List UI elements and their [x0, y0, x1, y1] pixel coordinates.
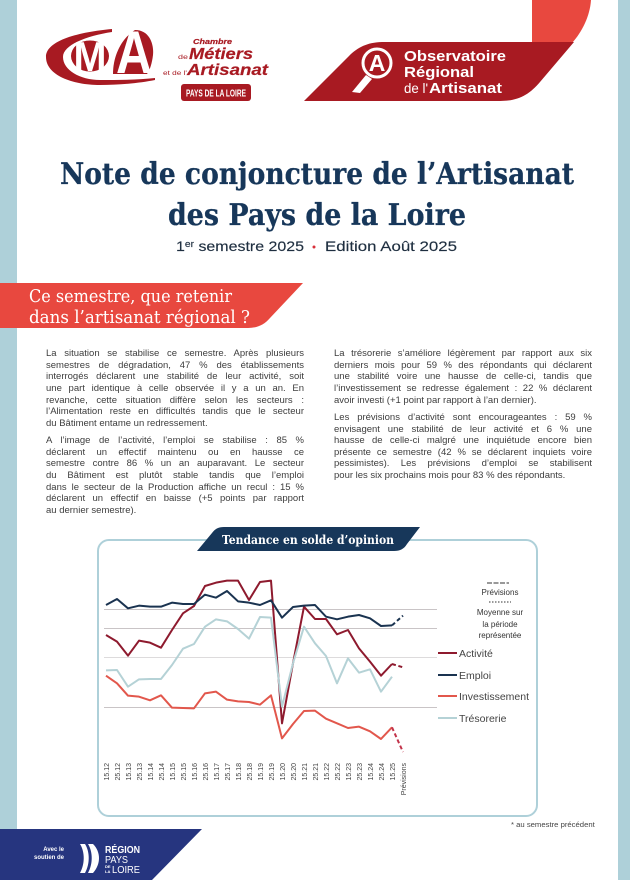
text: l’Alimentation reste en difficultés tandis que le secteur [46, 406, 304, 417]
legend note: prévisions and moyenne: Moyenne sur [477, 608, 523, 617]
text: Les prévisions d’activité sont encourageantes : 59 % [334, 412, 592, 423]
x-axis labels: 15.19 [258, 763, 265, 781]
series: Emploi [106, 591, 403, 626]
x-axis labels: Prévisions [401, 763, 408, 795]
banner: Ce semestre, que retenir [0, 283, 303, 328]
footer text: avec le soutien de: soutien de [34, 855, 65, 861]
logo mark: CMA: M [74, 33, 106, 80]
icon: magnifying glass with A: A [369, 50, 385, 76]
text: interrogés déclarent une stabilité de leur activité, soit [46, 371, 304, 382]
x-axis labels: 15.14 [148, 763, 155, 781]
legend [438, 648, 529, 725]
region wordmark: RÉGION [105, 843, 140, 856]
logo pill: Pays de la Loire [181, 84, 251, 101]
right side bar [618, 0, 630, 880]
x-axis labels: 15.13 [126, 763, 133, 781]
series: Investissement [106, 676, 403, 752]
footer: Région Pays de la Loire [0, 829, 202, 880]
ribbon light red [532, 0, 591, 43]
text: dans le secteur de la Production affiche un recul : 15 % [46, 482, 304, 493]
x-axis labels [104, 763, 408, 795]
title [60, 157, 574, 233]
region wordmark [105, 843, 140, 876]
x-axis labels: 15.21 [302, 763, 309, 781]
series: Activité [106, 581, 403, 723]
icon: magnifying glass with A [352, 49, 391, 93]
x-axis labels: 25.24 [379, 763, 386, 781]
x-axis labels: 25.23 [357, 763, 364, 781]
logo text: et de l' [163, 71, 187, 77]
text: une part identique à celle observée il y a un an. En [46, 383, 304, 394]
x-axis labels: 15.18 [236, 763, 243, 781]
line chart series [106, 581, 403, 752]
region wordmark: DE [105, 864, 111, 869]
series: Trésorerie [106, 617, 392, 707]
x-axis labels: 25.22 [335, 763, 342, 781]
text: La situation se stabilise ce semestre. Après plusieurs [46, 348, 304, 359]
subtitle: 1 [176, 238, 184, 254]
text: semestres de dégradation, 47 % des établissements [46, 360, 304, 371]
text: revanche, cette situation diffère selon les secteurs : [46, 395, 304, 406]
text: A l’image de l’activité, l’emploi se stabilise : 85 % [46, 435, 304, 446]
title: Note de conjoncture de l’Artisanat [60, 157, 574, 192]
text: derniers mois pour 59 % des répondants qui déclarent [334, 360, 592, 371]
text: envisagent une stabilité de leur activité et 6 % une [334, 424, 592, 435]
text: au dernier semestre). [46, 505, 136, 516]
icon: region mark [80, 844, 99, 873]
text: pour les six prochains mois pour 83 % des répondants. [334, 470, 565, 481]
region wordmark: LA [105, 869, 110, 874]
x-axis labels: 25.15 [181, 763, 188, 781]
average grid lines [104, 610, 437, 708]
footnote: * au semestre précédent [511, 820, 596, 829]
region wordmark: LOIRE [112, 865, 140, 876]
ribbon text: Régional [404, 64, 474, 81]
title: des Pays de la Loire [168, 198, 466, 233]
legend item: Emploi: Emploi [459, 670, 491, 682]
logo text: Artisanat [186, 62, 269, 79]
ribbon text [404, 48, 506, 97]
logo mark: CMA [46, 19, 155, 86]
text: déclarent un effectif en baisse (+5 points par rapport [46, 493, 304, 504]
text: La trésorerie s’améliore légèrement par rapport aux six [334, 348, 592, 359]
subtitle: semestre 2025 [194, 238, 304, 254]
logo text: de [178, 55, 189, 61]
legend note: prévisions and moyenne: Prévisions [482, 588, 518, 597]
legend note: prévisions and moyenne [477, 583, 523, 640]
text: une stabilité voire une hausse de celle-ci, tandis que [334, 371, 592, 382]
x-axis labels: 25.14 [159, 763, 166, 781]
logo text: Métiers [189, 46, 253, 63]
x-axis labels: 25.12 [115, 763, 122, 781]
text column left [46, 348, 304, 516]
x-axis labels: 25.20 [291, 763, 298, 781]
x-axis labels: 25.16 [203, 763, 210, 781]
ribbon text: de l' [404, 80, 428, 96]
subtitle: er [185, 239, 194, 249]
x-axis labels: 15.24 [368, 763, 375, 781]
logo mark: CMA: A [116, 19, 152, 86]
x-axis labels: 15.25 [390, 763, 397, 781]
x-axis labels: 15.22 [324, 763, 331, 781]
text: pessimistes). Les prévisions d’emploi se stabilisent [334, 458, 592, 469]
legend item: Activité: Activité [459, 648, 493, 660]
footer text: avec le soutien de [34, 847, 65, 861]
x-axis labels: 15.12 [104, 763, 111, 781]
ribbon dark red [304, 42, 574, 101]
text: l’investissement se redresse également : 22 % déclarent [334, 383, 592, 394]
ribbon: Observatoire Régional de l'Artisanat [304, 0, 591, 101]
logo pill: Pays de la Loire: PAYS DE LA LOIRE [186, 88, 246, 100]
footer text: avec le soutien de: Avec le [43, 847, 65, 853]
text: présente ce semestre (42 % se déclarent inquiets voire [334, 447, 592, 458]
x-axis labels: 15.17 [214, 763, 221, 781]
x-axis labels: 25.17 [225, 763, 232, 781]
x-axis labels: 15.20 [280, 763, 287, 781]
chart heading: Tendance en solde d’opinion [222, 533, 394, 547]
logo text: Chambre [193, 37, 232, 46]
chart frame [98, 540, 537, 816]
logo: CMA Chambre de Métiers et de l'Artisanat [46, 19, 269, 101]
ribbon text: Observatoire [404, 48, 506, 65]
x-axis labels: 15.16 [192, 763, 199, 781]
chart heading [197, 527, 420, 551]
text: du Bâtiment est plutôt stable tandis que l’emploi [46, 470, 304, 481]
text: avoir investi (+1 point par rapport à l’an dernier). [334, 395, 537, 406]
region wordmark: PAYS [105, 855, 128, 866]
left side bar [0, 0, 17, 830]
logo text [163, 37, 269, 79]
subtitle [176, 238, 457, 254]
banner: Ce semestre, que retenir: Ce semestre, que retenir [29, 286, 232, 307]
text: déclarent un effectif maintenu ou en hausse ce [46, 447, 304, 458]
text column right [334, 348, 592, 481]
x-axis labels: 25.13 [137, 763, 144, 781]
x-axis labels: 15.23 [346, 763, 353, 781]
legend item: Trésorerie: Trésorerie [459, 713, 507, 725]
x-axis labels: 25.19 [269, 763, 276, 781]
x-axis labels: 15.15 [170, 763, 177, 781]
legend note: prévisions and moyenne: la période [482, 620, 518, 629]
x-axis labels: 25.18 [247, 763, 254, 781]
subtitle: Edition Août 2025 [325, 238, 457, 254]
x-axis labels: 25.21 [313, 763, 320, 781]
legend note: prévisions and moyenne: représentée [479, 631, 522, 640]
legend item: Investissement: Investissement [459, 691, 529, 703]
text: semestre contre 86 % un an auparavant. Le secteur [46, 458, 304, 469]
text: du Bâtiment entame un redressement. [46, 418, 208, 429]
banner: Ce semestre, que retenir: dans l’artisanat régional ? [29, 307, 250, 328]
ribbon text: Artisanat [429, 80, 502, 97]
panel: chart Tendance en solde d'opinion [98, 527, 537, 816]
text: hausse de celle-ci malgré une inquiétude encore bien [334, 435, 592, 446]
